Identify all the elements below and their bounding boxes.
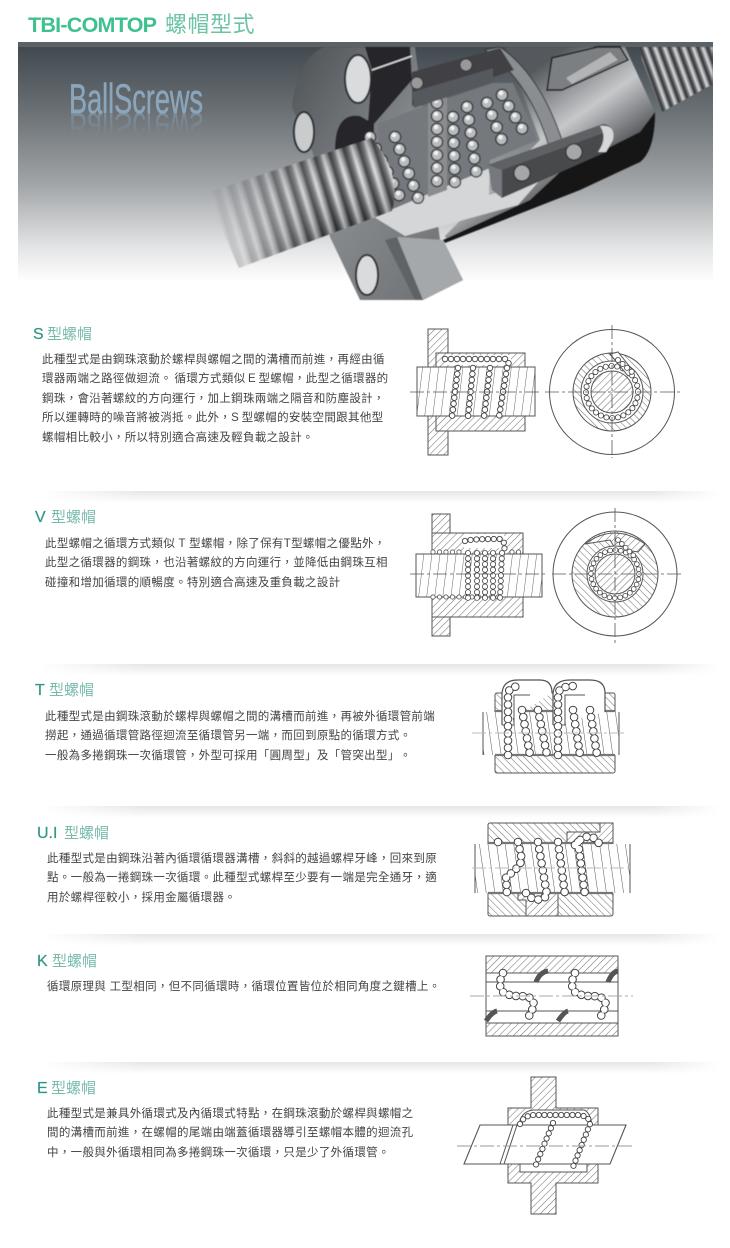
diagram: E type section <box>457 1076 632 1214</box>
divider shadow <box>75 1062 696 1070</box>
panel: K type nut <box>37 953 633 1036</box>
icon: upper recirculation plate <box>411 48 514 108</box>
heading: S type: 型螺帽 <box>47 326 92 343</box>
diagram: V type end view <box>552 508 681 643</box>
text block: V type description: 此型螺帽之循環方式類似 T 型螺帽，除了保有T型螺帽之優點外， 此型之循環器的鋼珠，也沿著螺紋的方向運行，並降低由鋼珠互相 碰撞和增加循環的順暢度。特別適合高速及重負載之設計 <box>45 538 388 589</box>
heading: S type: S <box>33 326 44 343</box>
icon: lower return plate <box>488 124 613 198</box>
divider shadow <box>75 806 696 814</box>
heading: T type: 型螺帽 <box>49 682 94 699</box>
heading: E type: 型螺帽 <box>51 1080 96 1097</box>
diagram: S type end view <box>545 325 680 458</box>
diagram: S type section <box>410 328 539 456</box>
icon: right screw shaft <box>640 47 713 112</box>
heading: T type: T <box>35 682 45 699</box>
title: TBI-COMTOP <box>28 13 156 37</box>
panel: U.I type nut <box>37 822 630 916</box>
diagram: U.I type section <box>472 822 630 916</box>
text block: T type description: 此種型式是由鋼珠滾動於螺桿與螺帽之間的溝槽而前進，再被外循環管前端 撈起，通過循環管路徑迴流至循環管另一端，而回到原點的循環方式。 一般為多捲鋼珠一次循環管，外型可採用「圓周型」及「管突出型」。 <box>45 711 435 762</box>
heading: U.I type: U.I <box>37 825 57 842</box>
divider shadow <box>75 491 696 499</box>
heading: K type: K <box>37 953 48 970</box>
heading: K type: 型螺帽 <box>52 953 97 970</box>
panel: V type nut <box>35 508 681 643</box>
heading: BallScrews logotype: BallScrews <box>69 104 203 151</box>
heading: BallScrews logotype <box>71 82 202 130</box>
diagram: K type section <box>470 956 633 1036</box>
panel: S type nut <box>33 325 680 458</box>
heading: V type: V <box>35 509 46 526</box>
hero banner: ball screw illustration <box>18 42 713 301</box>
icon: ball cut-away <box>369 83 540 236</box>
heading: U.I type: 型螺帽 <box>64 825 109 842</box>
text block: K type description: 循環原理與 工型相同，但不同循環時，循環位置皆位於相同角度之鍵槽上。 <box>47 981 441 993</box>
icon: left screw shaft <box>206 138 394 268</box>
heading: V type: 型螺帽 <box>51 509 96 526</box>
panel: E type nut <box>37 1076 632 1214</box>
title <box>28 12 255 37</box>
diagram: T type section <box>472 679 624 774</box>
icon: flange <box>292 47 463 300</box>
heading: BallScrews logotype: BallScrews <box>69 75 203 122</box>
text block: E type description: 此種型式是兼具外循環式及內循環式特點，在鋼珠滾動於螺桿與螺帽之 間的溝槽而前進，在螺帽的尾端由端蓋循環器導引至螺帽本體的迴流孔 中，一般與外循環相同為多捲鋼珠一次循環，只是少了外循環管。 <box>47 1108 413 1159</box>
text block: U.I type description: 此種型式是由鋼珠沿著內循環循環器溝槽，斜斜的越過螺桿牙峰，回來到原 點。一般為一捲鋼珠一次循環。此種型式螺桿至少要有一端是完全通牙，適 用於螺桿徑較小，採用金屬循環器。 <box>47 853 437 904</box>
panel: T type nut <box>35 679 624 774</box>
divider shadow <box>75 664 696 672</box>
heading: U.I type <box>37 825 109 842</box>
icon: nut body <box>443 47 655 243</box>
diagram: V type section <box>410 514 545 636</box>
divider shadow <box>75 934 696 942</box>
title: 螺帽型式 <box>165 12 255 37</box>
text block: S type description: 此種型式是由鋼珠滾動於螺桿與螺帽之間的溝槽而前進，再經由循 環器兩端之路徑做迴流。 循環方式類似 E 型螺帽，此型之循環器的 鋼珠，會沿著螺紋的方向運行，加上鋼珠兩端之隔音和防塵設計， 所以運轉時的噪音將被消抵。此外，S 型螺帽的安裝空間跟其他型 螺帽相比較小，所以特別適合高速及輕負載之設計。 <box>42 354 388 444</box>
heading: E type: E <box>37 1080 48 1097</box>
